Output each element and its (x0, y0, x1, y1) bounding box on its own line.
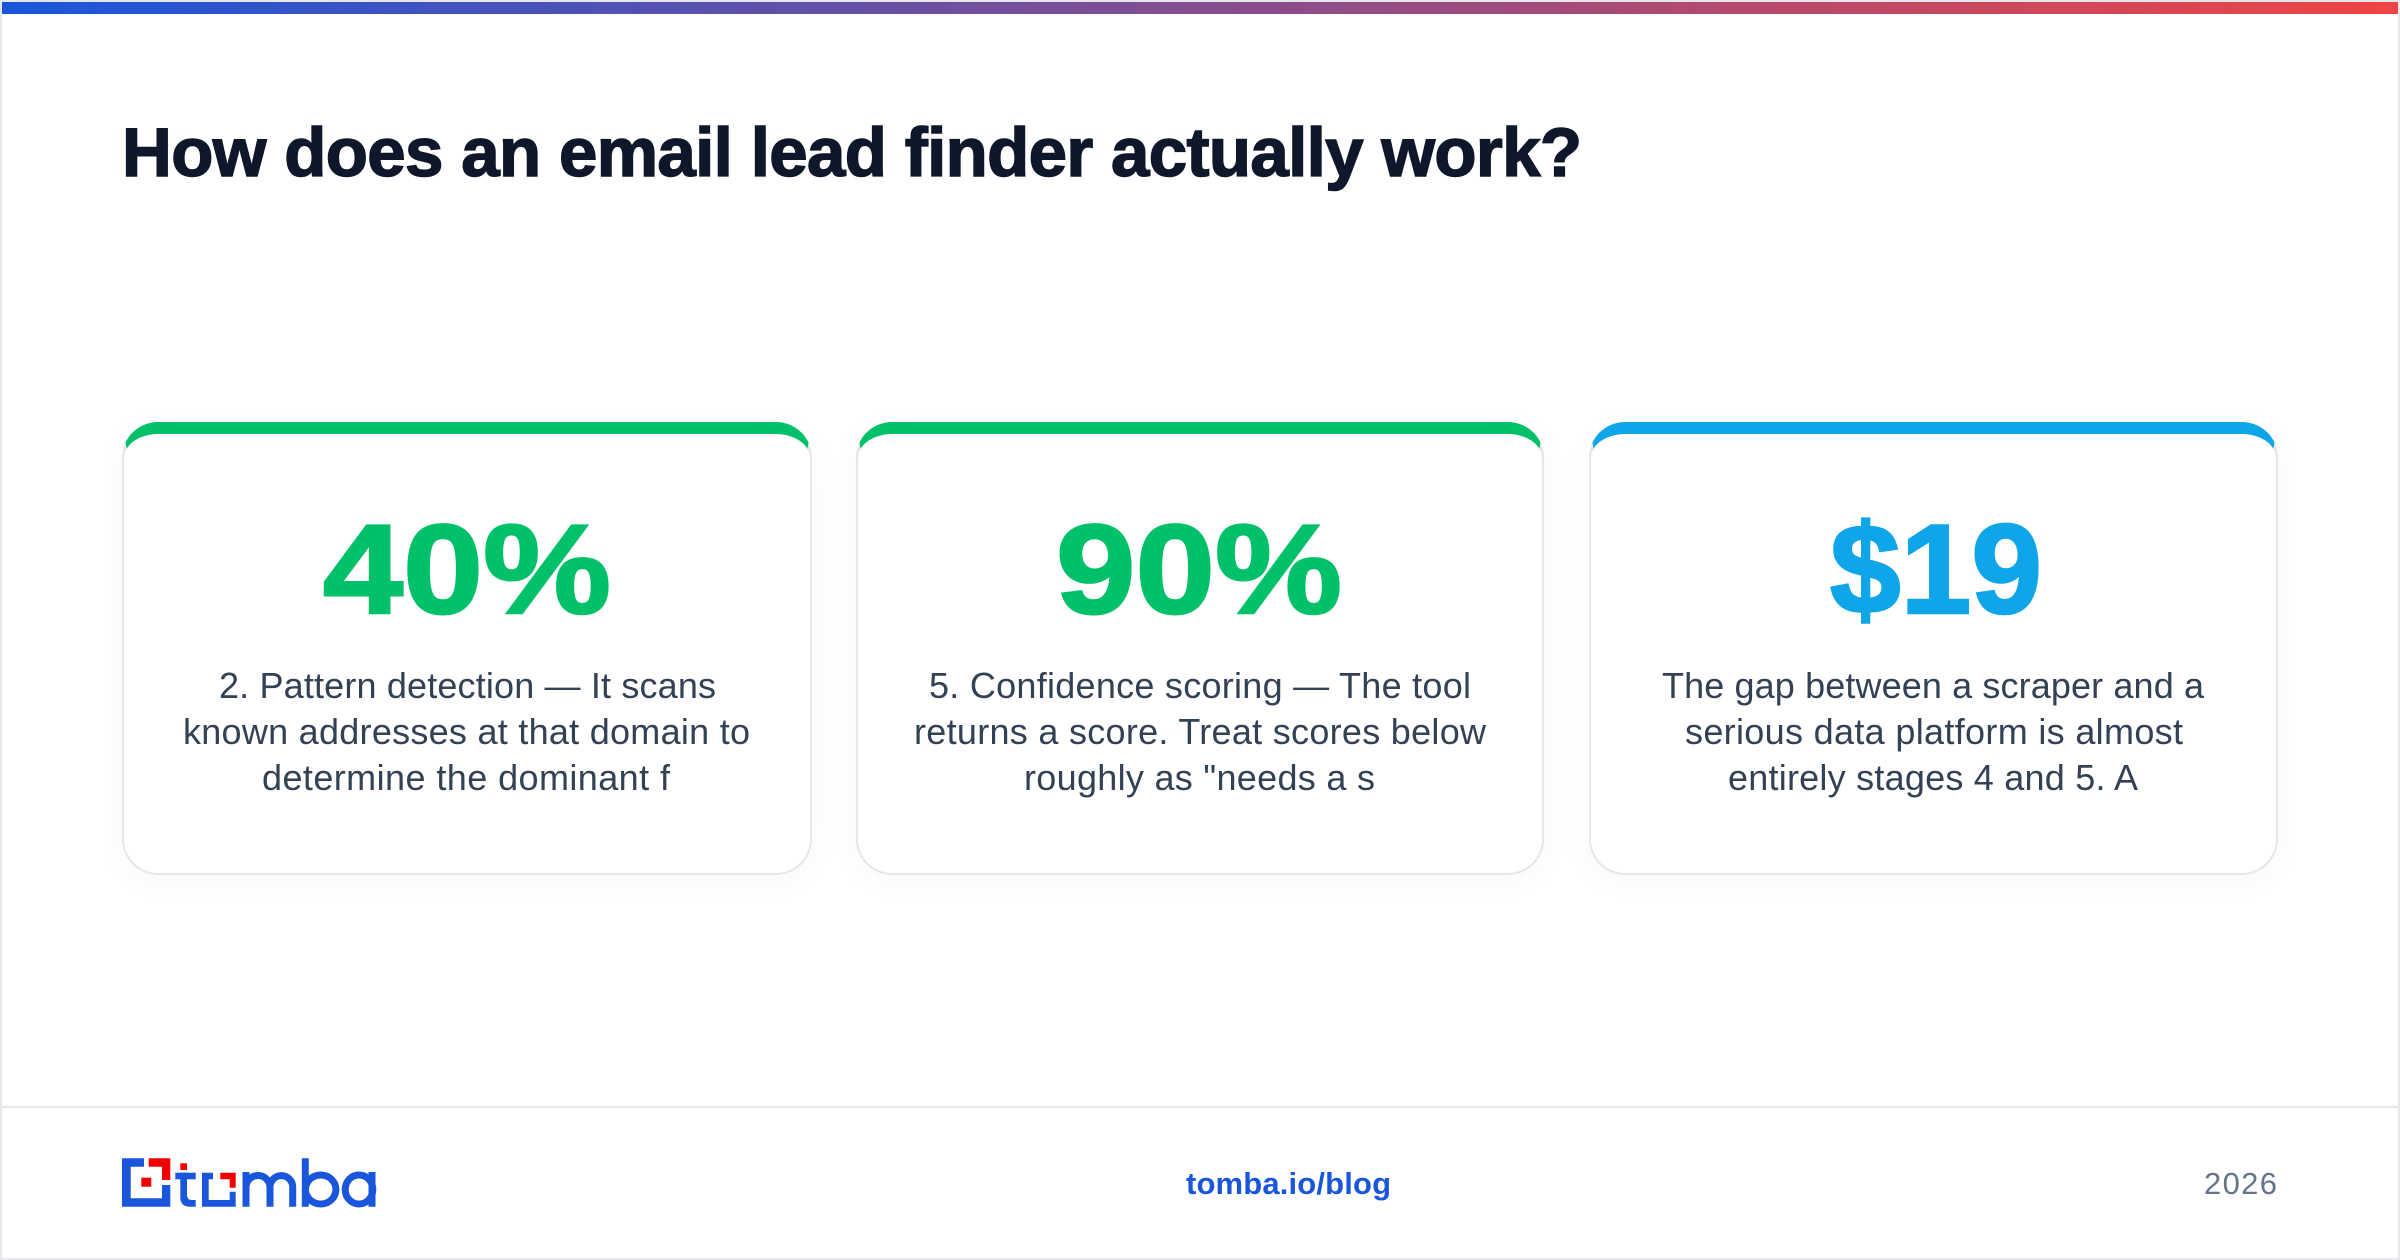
stat value: $19: $19 (1830, 498, 2042, 640)
stat value: 90%: 90% (1056, 498, 1342, 640)
stat description: 2. Pattern detection — It scans (219, 665, 716, 706)
stat description: entirely stages 4 and 5. A (1728, 757, 2138, 798)
stat description: The gap between a scraper and a (1662, 665, 2205, 706)
stat description (914, 665, 1487, 798)
stat description: known addresses at that domain to (183, 711, 750, 752)
panel: stat card 90% (856, 422, 1544, 875)
stat description: serious data platform is almost (1685, 711, 2183, 752)
panel: stat card 40% (122, 422, 812, 875)
stat value: 40%: 40% (323, 498, 611, 640)
panel: stat card $19 (1589, 422, 2278, 875)
footer year: 2026 (2204, 1166, 2277, 1201)
stat description: returns a score. Treat scores below (914, 711, 1487, 752)
top gradient bar (2, 2, 2398, 14)
stat description: roughly as "needs a s (1024, 757, 1375, 798)
stat description: determine the dominant f (262, 757, 671, 798)
stat description: 5. Confidence scoring — The tool (929, 665, 1471, 706)
footer (0, 1106, 2400, 1260)
stat description (183, 665, 750, 798)
stat description (1662, 665, 2205, 798)
footer link: tomba.io/blog (1186, 1166, 1391, 1201)
title: How does an email lead finder actually work? (122, 114, 1582, 191)
